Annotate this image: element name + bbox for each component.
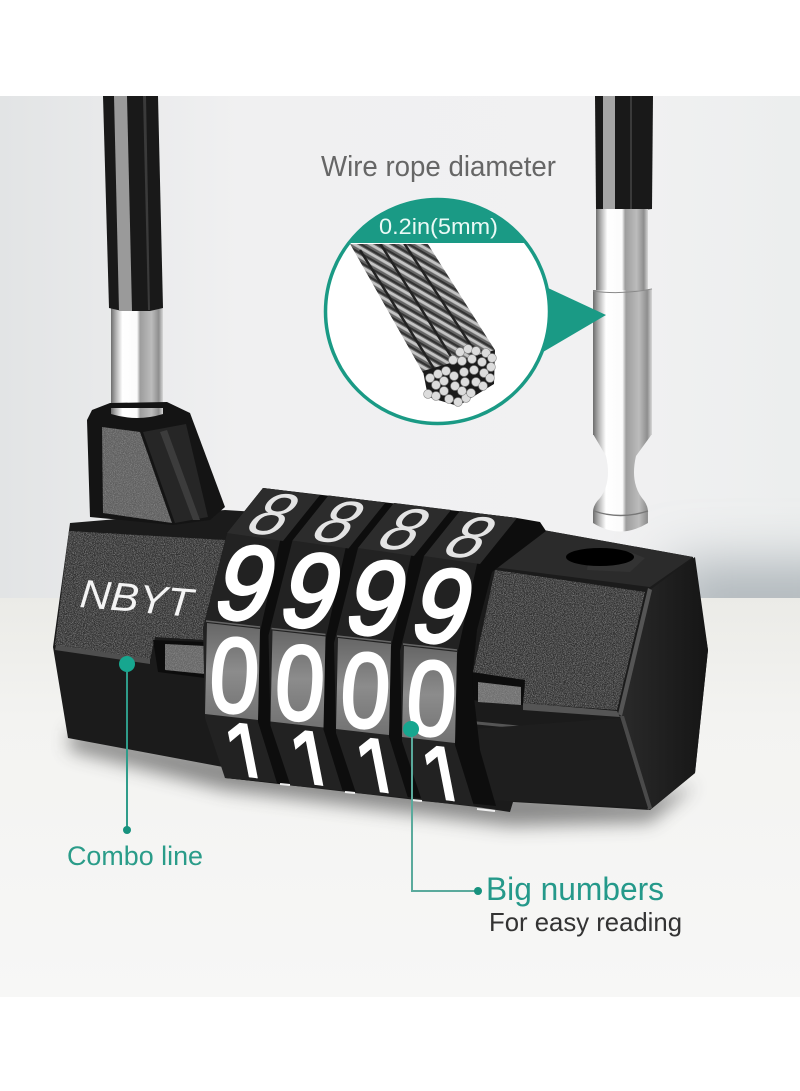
dial wheel 4: 0 [403,638,460,759]
keyhole [566,548,645,572]
dial wheel 4: 1 [412,724,477,834]
dial wheel 1: 9 [202,522,291,644]
shadow under lock [70,730,695,826]
dial wheel 3 [334,503,451,797]
dial wheel 2: 8 [297,488,381,556]
dial wheel 2 [268,496,386,790]
dial wheel 4 [400,511,517,804]
dial wheel 3: 1 [346,716,411,826]
callout: big numbers [403,721,682,937]
steel rope [350,240,496,406]
left slot [55,640,205,678]
dial wheel 1 [203,488,320,783]
lower front [473,718,648,808]
wheel gap highlights [280,784,495,811]
shackle collar [87,402,225,525]
diameter banner [348,198,527,243]
callout: combo line [67,656,203,871]
brand: NBYT: NBYT [78,572,197,626]
callout: pointer triangle [543,288,606,352]
right textured panel [473,570,645,710]
dial backing [203,488,546,806]
body silhouette [53,510,708,812]
dial wheel 2: 9 [268,529,357,652]
dial wheel 2: 1 [281,708,346,818]
dial wheel 2: 0 [271,622,329,744]
heading: wire rope diameter: Wire rope diameter [321,151,556,183]
dial wheel 1: 8 [232,481,315,549]
callout: wire rope magnifier [326,198,550,424]
dial wheel 4: 8 [429,504,512,572]
callout: big numbers: Big numbers [486,871,664,907]
dial wheel 1: 0 [206,615,263,736]
dial wheel 1: 1 [215,701,280,811]
right cable with steel pin [593,96,653,532]
dial wheel 3: 0 [337,630,394,751]
right side face [620,557,708,810]
left cable [103,96,163,416]
dial wheel 4: 9 [399,545,488,667]
dial wheel 3: 8 [363,496,446,564]
lock body [53,510,708,812]
left textured panel [55,531,226,660]
diameter banner: 0.2in(5mm) [379,214,498,239]
callout: big numbers: For easy reading [489,907,682,937]
dial wheel 3: 9 [333,537,422,659]
callout: combo line: Combo line [67,841,203,871]
right top face [493,530,693,587]
right slot [472,672,620,729]
